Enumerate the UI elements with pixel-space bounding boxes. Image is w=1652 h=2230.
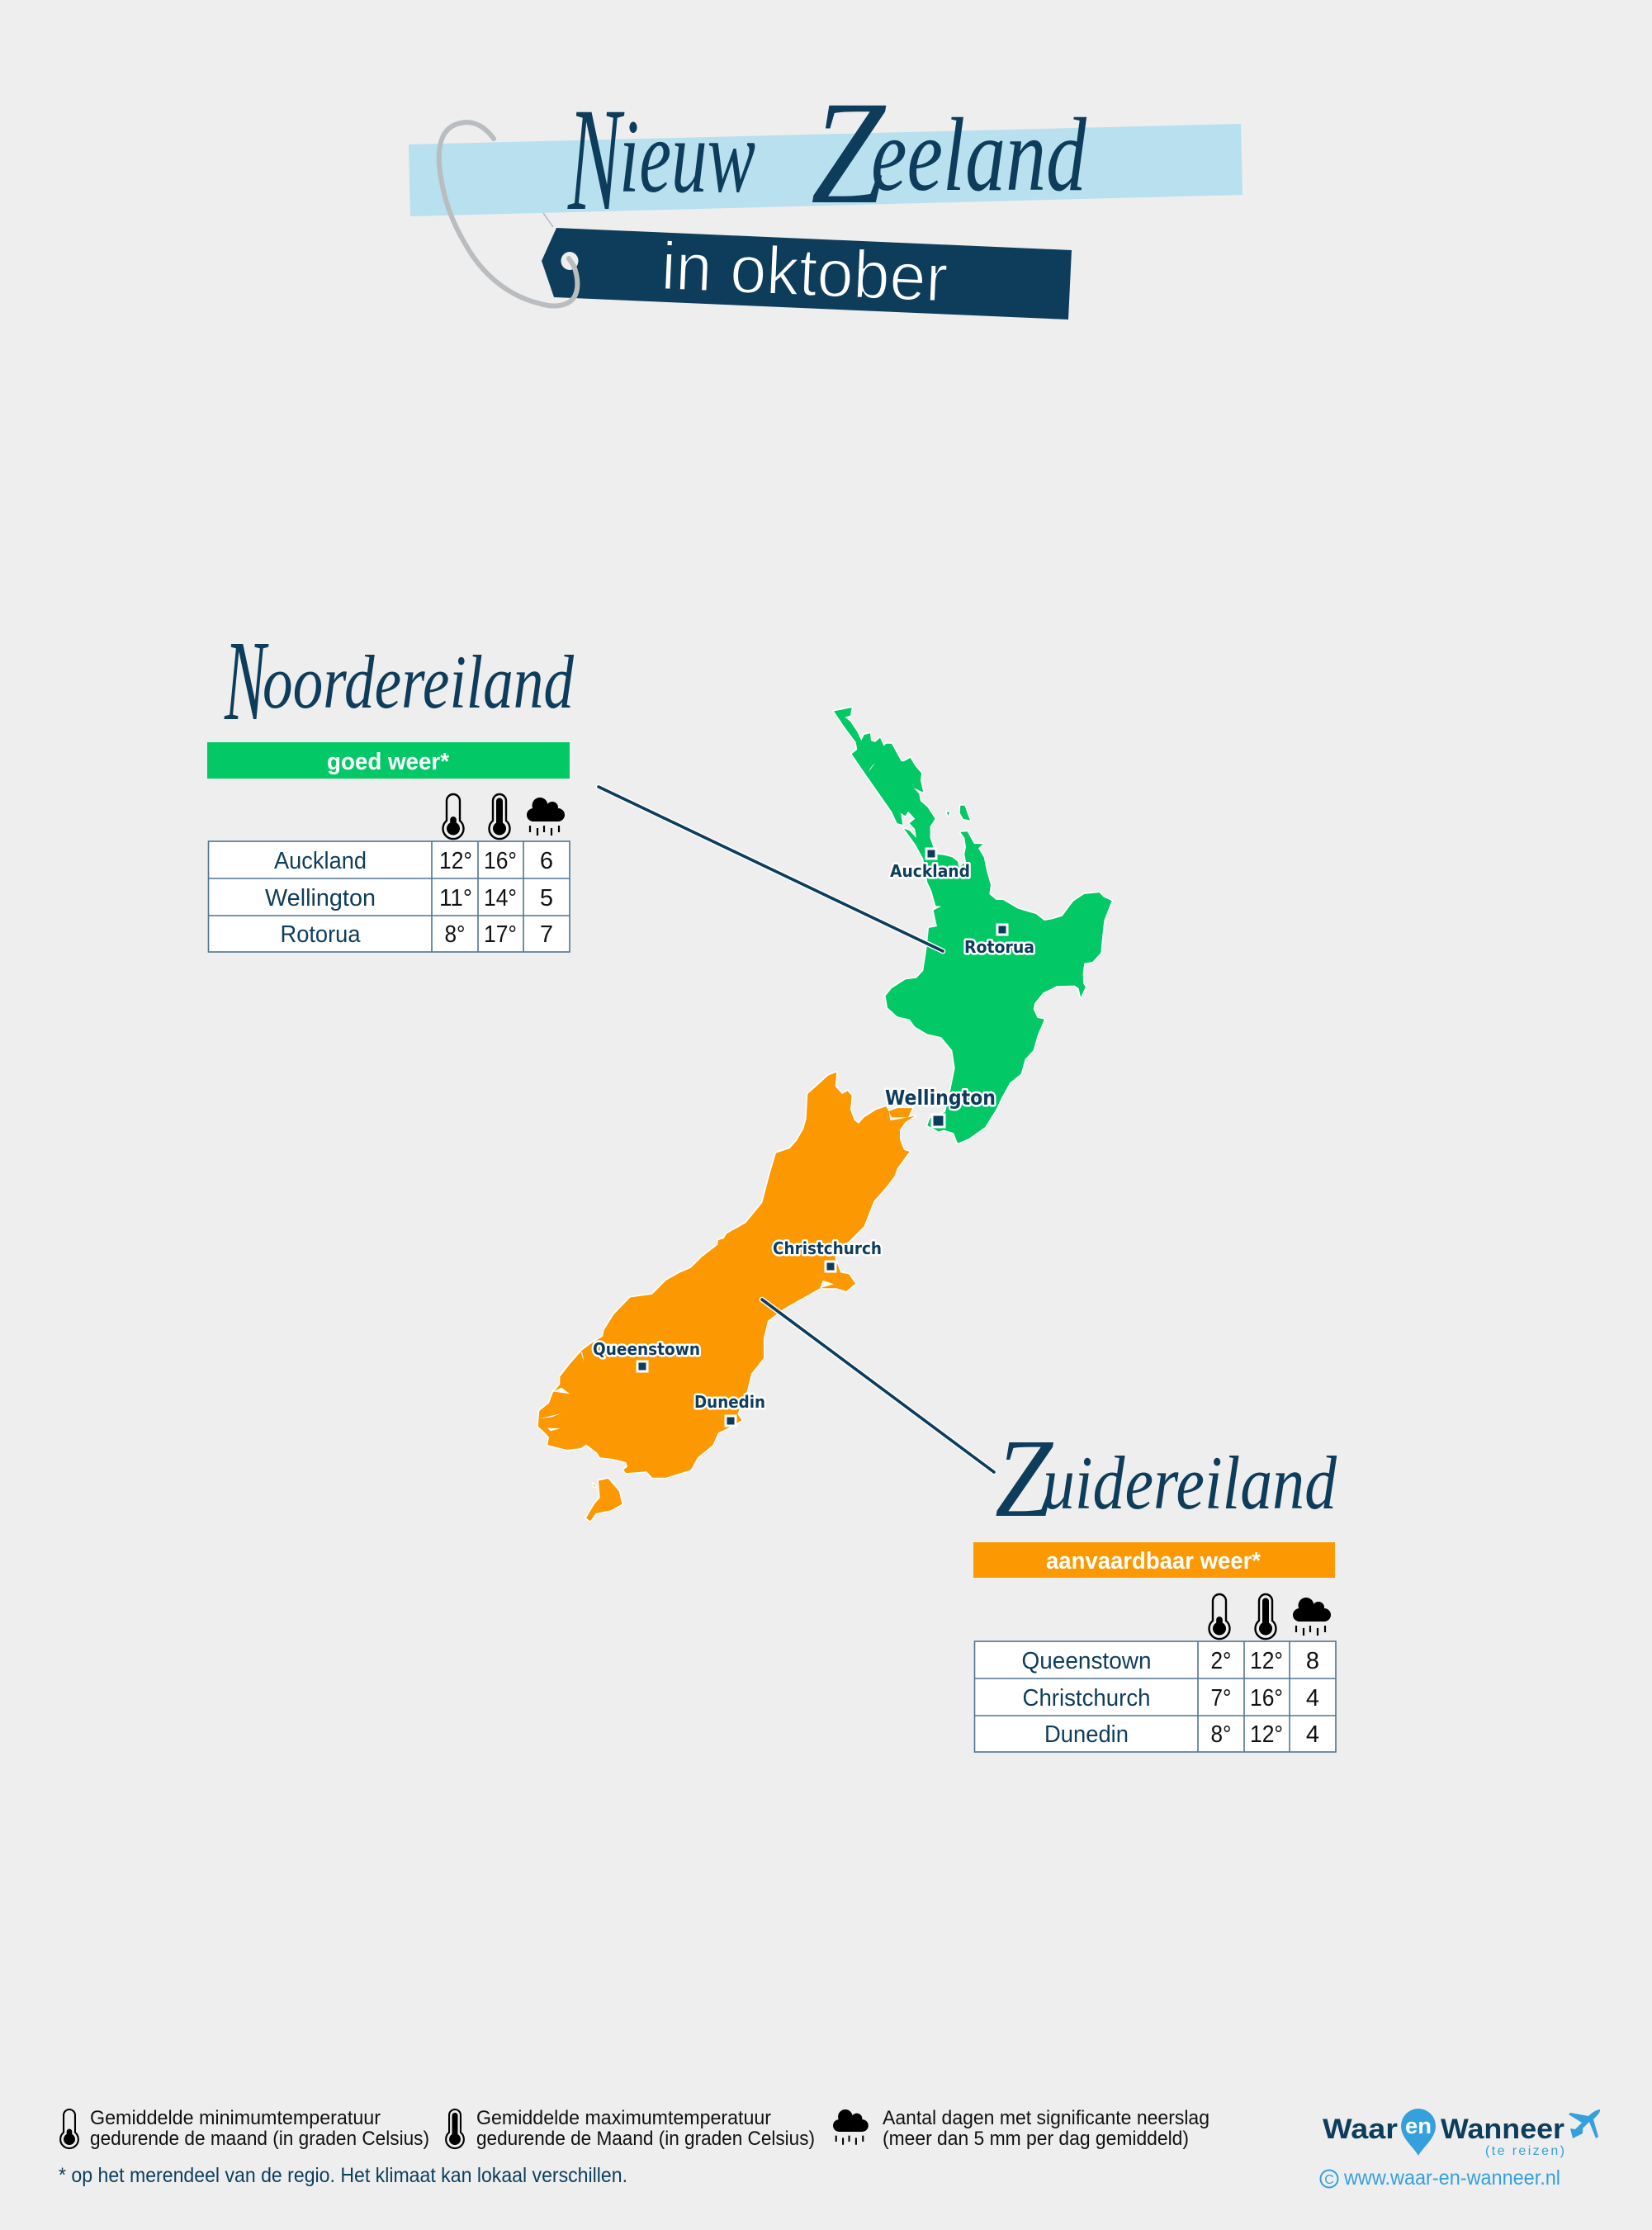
website credit: C [1324, 2173, 1334, 2187]
table: North Island cities: 12° [439, 848, 472, 874]
offshore islands [947, 806, 970, 821]
icon: rain cloud [1293, 1598, 1331, 1636]
city marker: Rotorua [964, 925, 1034, 957]
table: South Island cities: Dunedin [1044, 1721, 1129, 1748]
logo wordmark: Wanneer [1441, 2114, 1564, 2145]
title text: Nieuw Zeeland: eeland [871, 97, 1086, 213]
North Island shape [834, 708, 1112, 1143]
table: South Island cities: 4 [1306, 1721, 1319, 1748]
city marker: Christchurch [773, 1238, 882, 1271]
city marker: Dunedin [694, 1392, 765, 1426]
Kaipara inlet sliver [869, 763, 875, 773]
table: South Island cities: Queenstown [1022, 1648, 1151, 1674]
legend text: maximum temperature [476, 2107, 815, 2150]
table: South Island cities: 8° [1210, 1721, 1232, 1748]
legend text: maximum temperature: gedurende de Maand (in graden Celsius) [476, 2128, 815, 2150]
legend text: minimum temperature: gedurende de maand (in graden Celsius) [90, 2128, 429, 2150]
table: South Island cities: Christchurch [1022, 1685, 1151, 1712]
title text: Nieuw Zeeland: N [567, 77, 625, 241]
rating bar: aanvaardbaar weer: aanvaardbaar weer* [1046, 1548, 1261, 1574]
legend [60, 2107, 1209, 2150]
icon: maximum temperature [1255, 1594, 1276, 1639]
table: South Island cities: 7° [1210, 1685, 1232, 1712]
legend text: minimum temperature [90, 2107, 429, 2150]
table: North Island cities: Rotorua [281, 921, 361, 948]
icon: maximum temperature [489, 794, 510, 839]
table: North Island cities: 11° [439, 885, 472, 911]
logo wordmark: Waar [1323, 2114, 1398, 2145]
city marker: Wellington [885, 1086, 996, 1127]
table: North Island cities: 6 [540, 848, 553, 874]
logo: Waar en Wanneer [1321, 2109, 1600, 2190]
title text: Nieuw Zeeland: ieuw [619, 99, 755, 215]
rating bar: goed weer: goed weer* [327, 749, 450, 775]
table: North Island cities: 5 [540, 885, 553, 911]
Stewart Island [586, 1479, 622, 1521]
South Island shape [538, 1072, 915, 1478]
table: South Island cities: 8 [1306, 1648, 1319, 1674]
title banner [409, 70, 1243, 320]
footnote: * op het merendeel van de regio. Het klimaat kan lokaal verschillen. [59, 2164, 627, 2187]
legend icon: rain cloud [833, 2109, 869, 2145]
table: North Island cities [208, 841, 570, 952]
heading: Noordereiland: oordereiland [263, 640, 575, 724]
title text: Nieuw Zeeland: Z [811, 70, 887, 234]
table: North Island cities: 14° [484, 885, 517, 911]
logo tagline: (te reizen) [1485, 2144, 1564, 2158]
table: North Island cities: Auckland [274, 848, 367, 874]
table: North Island cities: 8° [444, 921, 466, 948]
leader line: South Island [762, 1300, 994, 1472]
legend icon: minimum temperature [60, 2109, 78, 2148]
map: North Island [834, 708, 1112, 1143]
table: North Island cities: 7 [540, 921, 553, 948]
city marker: Auckland [890, 849, 970, 881]
table: South Island cities: 2° [1210, 1648, 1232, 1674]
website credit: www.waar-en-wanneer.nl [1343, 2166, 1560, 2190]
table: South Island cities: 12° [1250, 1648, 1283, 1674]
icon: airplane [1569, 2109, 1600, 2138]
table: South Island cities: 12° [1250, 1721, 1283, 1748]
heading: Noordereiland [224, 618, 575, 745]
city marker: Rotorua: Rotorua [964, 937, 1034, 957]
table: North Island cities: 17° [484, 921, 517, 948]
heading: Zuidereiland: uidereiland [1043, 1441, 1337, 1525]
legend text: precipitation [883, 2107, 1209, 2150]
heading: Zuidereiland [995, 1417, 1337, 1541]
subtitle: in oktober: in oktober [660, 229, 949, 316]
city marker: Auckland: Auckland [890, 861, 970, 881]
legend text: precipitation: Aantal dagen met significante neerslag [883, 2107, 1209, 2129]
city marker: Christchurch: Christchurch [773, 1238, 882, 1258]
city marker: Queenstown [593, 1339, 700, 1371]
legend text: precipitation: (meer dan 5 mm per dag gemiddeld) [883, 2128, 1189, 2150]
icon: minimum temperature [443, 794, 464, 839]
panel: Zuidereiland [973, 1417, 1337, 1752]
city marker: Wellington: Wellington [885, 1086, 996, 1110]
table: North Island cities: 16° [484, 848, 517, 874]
legend text: maximum temperature: Gemiddelde maximumtemperatuur [476, 2107, 771, 2129]
title text: Nieuw Zeeland [567, 70, 1086, 241]
icon: map pin [1401, 2109, 1436, 2156]
heading: Noordereiland: N [224, 618, 269, 745]
legend icon: maximum temperature [446, 2109, 464, 2148]
table: South Island cities: 4 [1306, 1685, 1319, 1712]
lake and fiord details [539, 1111, 908, 1431]
table: South Island cities [974, 1641, 1336, 1752]
rating bar: goed weer [207, 742, 570, 779]
light blue title band [409, 124, 1243, 216]
table: North Island cities: Wellington [265, 885, 376, 911]
icon: minimum temperature [1209, 1594, 1230, 1639]
panel: Noordereiland [207, 618, 575, 952]
map: South Island [538, 1072, 915, 1521]
logo wordmark [1323, 2114, 1564, 2145]
icon: map pin: en [1405, 2114, 1432, 2138]
city marker: Queenstown: Queenstown [593, 1339, 700, 1359]
city marker: Dunedin: Dunedin [694, 1392, 765, 1412]
leader line: North Island [599, 787, 943, 951]
legend text: minimum temperature: Gemiddelde minimumtemperatuur [90, 2107, 381, 2129]
rating bar: aanvaardbaar weer [973, 1542, 1335, 1578]
luggage tag [439, 122, 1072, 320]
table: South Island cities: 16° [1250, 1685, 1283, 1712]
heading: Zuidereiland: Z [995, 1417, 1053, 1541]
icon: rain cloud [527, 798, 565, 836]
